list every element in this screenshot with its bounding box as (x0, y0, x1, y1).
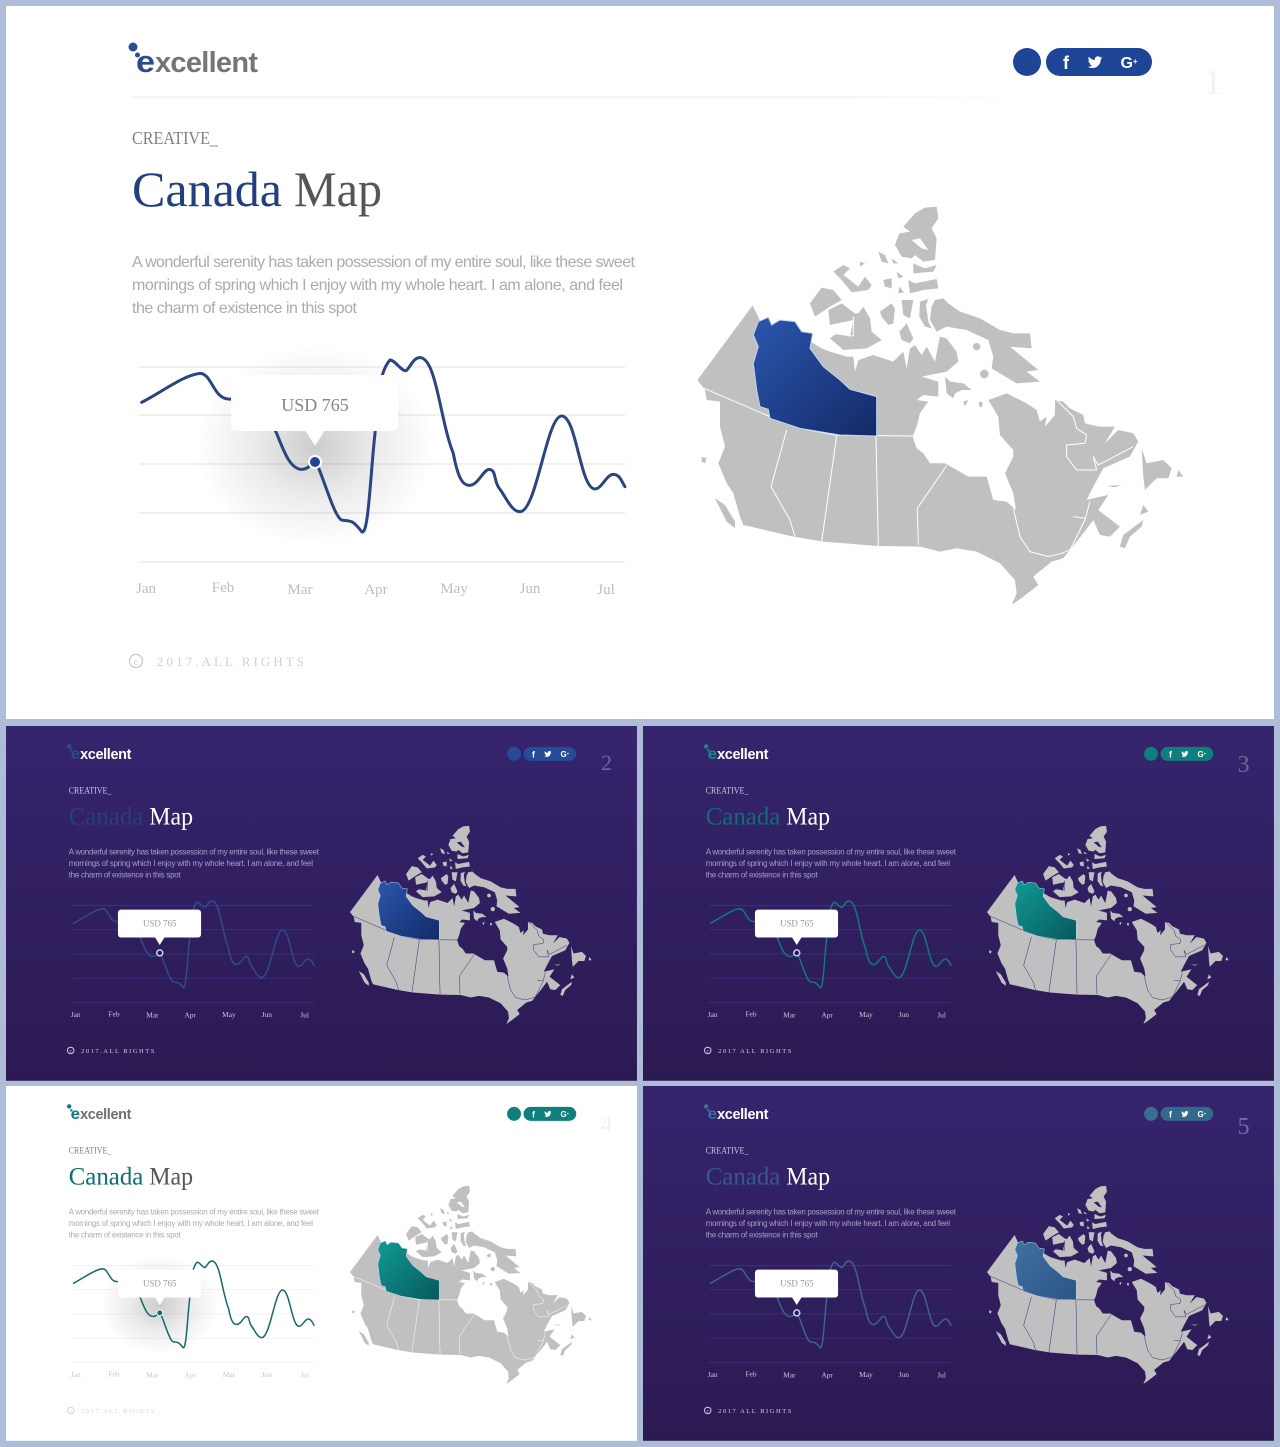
logo: xcellent (80, 1107, 132, 1123)
description: mornings of spring which I enjoy with my whole heart. I am alone, and feel (69, 859, 313, 868)
month labels: Mar (783, 1371, 796, 1380)
logo (704, 1104, 769, 1123)
month labels: Jan (71, 1010, 81, 1019)
eyebrow: CREATIVE_ (69, 1146, 112, 1156)
month labels (708, 1010, 946, 1020)
month labels (71, 1370, 309, 1380)
title: Map (149, 804, 193, 831)
social icons: f (1063, 53, 1070, 73)
social icons: G (1120, 55, 1133, 72)
social icons: G (1198, 750, 1204, 759)
title (132, 161, 382, 217)
month labels: Feb (745, 1010, 757, 1019)
month labels: Mar (288, 582, 312, 598)
month labels: Jun (262, 1010, 272, 1019)
month labels: Jan (71, 1370, 81, 1379)
title: Canada (706, 1164, 780, 1191)
month labels: Jul (937, 1011, 946, 1020)
title: Canada (69, 804, 143, 831)
tooltip: USD 765 (143, 1279, 177, 1289)
social icons: f (532, 749, 535, 759)
title: Canada (132, 161, 282, 217)
month labels: May (859, 1010, 873, 1019)
title (69, 804, 193, 831)
month labels: Feb (108, 1010, 120, 1019)
description: the charm of existence in this spot (706, 870, 818, 879)
data point (309, 456, 321, 468)
social icons: G (561, 1110, 567, 1119)
tooltip: USD 765 (281, 395, 349, 415)
title (706, 804, 830, 831)
month labels: Jul (597, 582, 615, 598)
title (706, 1164, 830, 1191)
data point (794, 950, 800, 956)
logo: xcellent (717, 1107, 769, 1123)
social icons: + (567, 751, 570, 756)
month labels: Mar (146, 1371, 159, 1380)
social icons (507, 747, 576, 761)
month labels: May (859, 1370, 873, 1379)
copyright: 2017.ALL RIGHTS (81, 1048, 155, 1055)
copyright: 2017 ALL RIGHTS (718, 1048, 792, 1055)
social icons: f (1169, 1109, 1172, 1119)
description: the charm of existence in this spot (69, 1230, 181, 1239)
panel: slide 1 white blue (6, 6, 1274, 719)
tooltip (755, 1270, 838, 1305)
map of Canada (987, 826, 1229, 1024)
description: A wonderful serenity has taken possession of my entire soul, like these sweet (706, 847, 957, 856)
month labels: Jan (708, 1370, 718, 1379)
title: Map (294, 161, 382, 217)
social icons: + (1204, 1111, 1207, 1116)
logo: e (708, 1106, 718, 1123)
logo: xcellent (155, 47, 258, 79)
page number: 2 (601, 750, 612, 775)
description: the charm of existence in this spot (69, 870, 181, 879)
tooltip (118, 910, 201, 945)
description: A wonderful serenity has taken possession of my entire soul, like these sweet (69, 847, 320, 856)
line chart (136, 346, 625, 598)
page number: 1 (1204, 62, 1222, 102)
month labels (708, 1370, 946, 1380)
data point (157, 950, 163, 956)
tooltip: USD 765 (143, 919, 177, 929)
eyebrow: CREATIVE_ (706, 1146, 749, 1156)
description (132, 254, 636, 317)
title: Map (149, 1164, 193, 1191)
month labels: Jun (520, 581, 541, 597)
month labels: Feb (745, 1370, 757, 1379)
description (69, 1207, 320, 1239)
title: Map (786, 804, 830, 831)
month labels: Apr (821, 1371, 833, 1380)
logo (67, 1104, 132, 1123)
social icons: G (561, 750, 567, 759)
line chart (71, 901, 314, 1020)
month labels: Apr (184, 1011, 196, 1020)
logo: xcellent (80, 747, 132, 763)
description: the charm of existence in this spot (706, 1230, 818, 1239)
month labels: Mar (223, 1370, 236, 1379)
page number: 4 (601, 1112, 613, 1138)
copyright: 2017.ALL RIGHTS (157, 654, 304, 669)
tooltip (118, 1270, 201, 1305)
logo: e (708, 746, 718, 763)
month labels: Jul (937, 1371, 946, 1380)
month labels: Apr (821, 1011, 833, 1020)
logo (67, 744, 132, 763)
month labels: Jul (300, 1371, 309, 1380)
month labels: May (222, 1010, 236, 1019)
social icons (1144, 1107, 1213, 1121)
eyebrow: CREATIVE_ (132, 128, 219, 148)
line chart (708, 1261, 951, 1380)
month labels: Jan (708, 1010, 718, 1019)
map of Canada (350, 1186, 592, 1384)
social icons: f (1169, 749, 1172, 759)
month labels: Feb (212, 580, 234, 596)
description: mornings of spring which I enjoy with my whole heart. I am alone, and feel (706, 1219, 950, 1228)
panel: slide 4 white teal (6, 1086, 637, 1441)
data point (794, 1310, 800, 1316)
description: the charm of existence in this spot (132, 300, 358, 317)
social icons: + (1204, 751, 1207, 756)
social icons: + (1133, 57, 1138, 66)
panel: slide 5 dark steel (643, 1086, 1274, 1441)
description (706, 847, 957, 879)
copyright: c (707, 1049, 710, 1054)
page number: 3 (1238, 752, 1250, 778)
line chart (708, 901, 951, 1020)
eyebrow: CREATIVE_ (69, 786, 112, 796)
description: mornings of spring which I enjoy with my whole heart. I am alone, and feel (69, 1219, 313, 1228)
logo: xcellent (717, 747, 769, 763)
description: mornings of spring which I enjoy with my whole heart. I am alone, and feel (132, 277, 623, 294)
copyright: 2017 ALL RIGHTS (718, 1408, 792, 1415)
month labels (136, 580, 615, 598)
month labels: Mar (783, 1011, 796, 1020)
social icons: G (1198, 1110, 1204, 1119)
copyright: c (70, 1409, 73, 1414)
copyright: 2017 ALL RIGHTS (81, 1408, 155, 1415)
tooltip (231, 375, 398, 446)
month labels: Feb (108, 1370, 120, 1379)
month labels: Apr (184, 1371, 196, 1380)
month labels: Mar (146, 1011, 159, 1020)
description: A wonderful serenity has taken possession of my entire soul, like these sweet (706, 1207, 957, 1216)
copyright: c (707, 1409, 710, 1414)
copyright: c (70, 1049, 73, 1054)
map of Canada (350, 826, 592, 1024)
month labels: Jun (899, 1010, 909, 1019)
logo (704, 744, 769, 763)
month labels: Jun (262, 1370, 272, 1379)
description: A wonderful serenity has taken possession of my entire soul, like these sweet (69, 1207, 320, 1216)
map of Canada (697, 207, 1183, 605)
description: A wonderful serenity has taken possession of my entire soul, like these sweet (132, 254, 636, 271)
logo: e (136, 44, 155, 79)
title (69, 1164, 193, 1191)
month labels: Jun (899, 1370, 909, 1379)
logo: e (71, 1106, 81, 1123)
map of Canada (987, 1186, 1229, 1384)
month labels: Jul (300, 1011, 309, 1020)
tooltip: USD 765 (780, 919, 814, 929)
eyebrow: CREATIVE_ (706, 786, 749, 796)
title: Canada (706, 804, 780, 831)
data point (157, 1310, 163, 1316)
logo: e (71, 746, 81, 763)
logo (128, 42, 258, 79)
month labels: Apr (364, 582, 388, 598)
title: Canada (69, 1164, 143, 1191)
description (69, 847, 320, 879)
tooltip: USD 765 (780, 1279, 814, 1289)
page number: 5 (1238, 1114, 1250, 1140)
tooltip (755, 910, 838, 945)
copyright: c (134, 657, 139, 668)
line chart (71, 1255, 314, 1380)
panel: slide 2 dark blue (6, 726, 637, 1081)
social icons (1144, 747, 1213, 761)
description: mornings of spring which I enjoy with my whole heart. I am alone, and feel (706, 859, 950, 868)
social icons: f (532, 1109, 535, 1119)
social icons (1013, 48, 1152, 76)
title: Map (786, 1164, 830, 1191)
social icons: + (567, 1111, 570, 1116)
social icons (507, 1107, 576, 1121)
month labels: Jan (136, 581, 156, 597)
month labels (71, 1010, 309, 1020)
panel: slide 3 dark teal (643, 726, 1274, 1081)
month labels: May (440, 581, 468, 597)
description (706, 1207, 957, 1239)
